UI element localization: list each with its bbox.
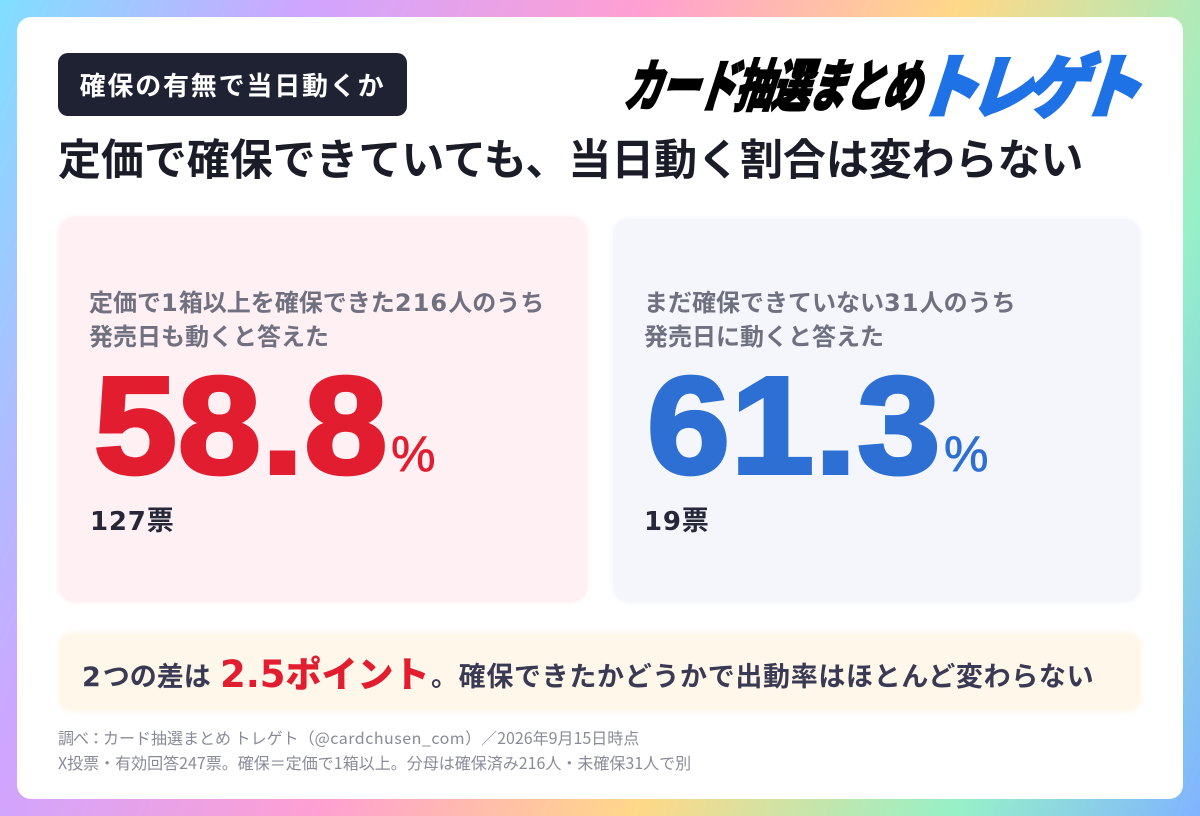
panel description [644,283,1016,352]
source note [58,725,691,774]
badge: 確保の有無で当日動くか [80,66,385,103]
badge [58,53,407,116]
panel description: まだ確保できていない31人のうち [644,283,1016,318]
panel description: 発売日に動くと答えた [644,317,884,352]
callout tail: 。確保できたかどうかで出動率はほとんど変わらない [431,655,1094,694]
big number: 58.8 [94,349,388,503]
panel description [89,283,544,352]
logo text: blue: トレゲト [908,32,1157,131]
percent sign: % [391,426,435,482]
source note: 調べ：カード抽選まとめ トレゲト（@cardchusen_com）／2026年9月15日時点 [58,725,639,749]
callout lead: 2つの差は [82,655,211,694]
vote count: 127票 [90,499,174,538]
callout highlight: 2.5ポイント [220,646,430,698]
logo [617,32,1157,131]
big number: 61.3 [647,349,941,503]
source note: X投票・有効回答247票。確保＝定価で1箱以上。分母は確保済み216人・未確保31人で別 [58,750,691,774]
panel: secured [59,217,587,602]
title: 定価で確保できていても、当日動く割合は変わらない [58,126,1083,188]
percent sign: % [944,426,988,482]
panel: not secured [613,219,1140,602]
logo text: black: カード抽選まとめ [617,43,939,123]
panel description: 定価で1箱以上を確保できた216人のうち [89,283,544,318]
callout [60,634,1140,710]
panel description: 発売日も動くと答えた [89,317,329,352]
vote count: 19票 [644,499,709,538]
